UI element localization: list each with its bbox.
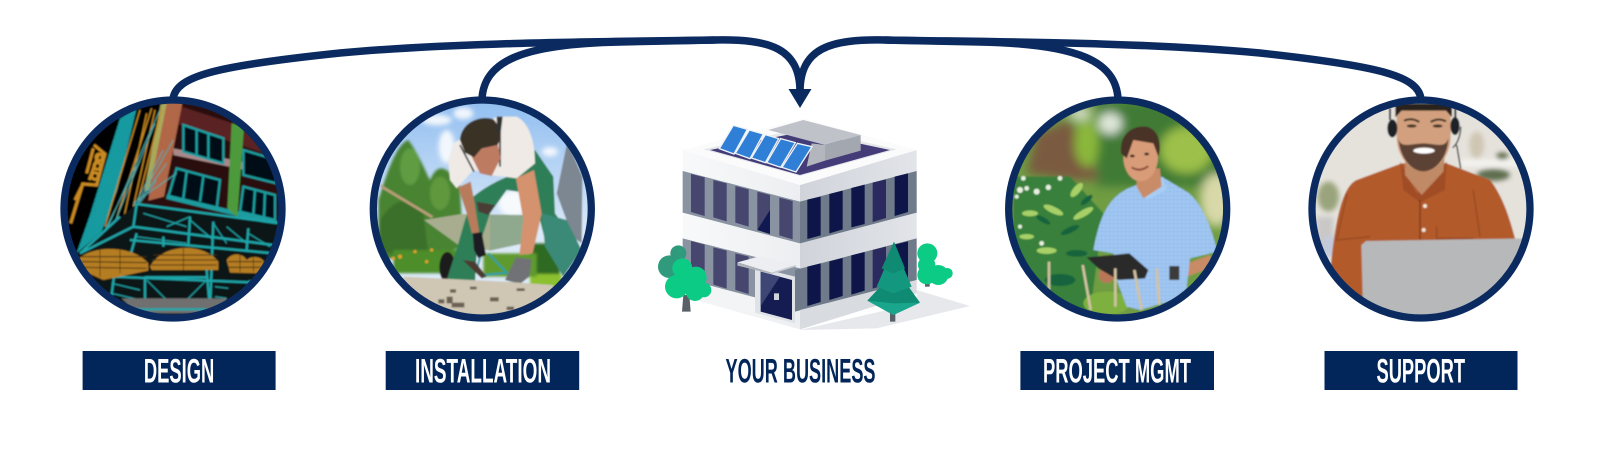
connector arrows to your business: [173, 40, 1421, 108]
front left tree: [665, 258, 711, 312]
headset: [1387, 108, 1461, 168]
panel: project mgmt: [1003, 97, 1233, 390]
neck: [1405, 155, 1445, 195]
panel: your business: [658, 118, 970, 390]
lower window band right: [795, 238, 917, 312]
illustration: office building with solar panels: [658, 118, 970, 330]
lower window band left: [683, 238, 800, 310]
circle ring: [1312, 100, 1530, 318]
photo: support agent with headset and laptop: [1316, 104, 1526, 314]
circle ring: [373, 100, 591, 318]
label: project mgmt: PROJECT MGMT: [1043, 352, 1191, 390]
roof: [683, 118, 917, 185]
label: project mgmt: [1020, 351, 1214, 390]
label: design: [83, 351, 276, 390]
door handles: [774, 293, 779, 300]
label: design: DESIGN: [144, 352, 214, 390]
upper window band left: [683, 171, 800, 243]
canopy: [737, 256, 796, 273]
laptop: [1360, 237, 1522, 314]
shirt: [1093, 177, 1217, 310]
head: [1396, 109, 1452, 166]
trees: [378, 140, 562, 287]
solar panels: [719, 125, 812, 172]
trousers: [446, 150, 558, 282]
head: [471, 144, 502, 177]
ground shadow: [800, 290, 970, 330]
label: installation: INSTALLATION: [415, 352, 551, 390]
photo: manager with clipboard among plants: [1012, 104, 1223, 314]
label: installation: [386, 351, 579, 390]
beard: [1398, 138, 1448, 171]
panel: design: [60, 97, 293, 390]
cobbles: [403, 276, 554, 314]
photo: wireframe building model: [68, 104, 278, 314]
traffic light: [71, 145, 105, 223]
panel: installation: [370, 97, 597, 390]
lower structure: [76, 205, 277, 302]
head: [1137, 168, 1162, 198]
upper window band right: [800, 171, 917, 243]
label: support: [1324, 351, 1518, 390]
teal band: [76, 108, 137, 255]
hair: [1395, 103, 1452, 117]
shirt: [1330, 162, 1516, 298]
circle ring: [1009, 100, 1227, 318]
label: support: SUPPORT: [1376, 352, 1465, 390]
photo: worker laying paving stones: [377, 104, 588, 314]
shirt: [448, 117, 535, 188]
foliage: [1013, 176, 1130, 315]
back left tree: [658, 245, 686, 278]
right tree: [917, 243, 953, 287]
orange domes: [79, 248, 264, 280]
circle ring: [64, 100, 282, 318]
entrance doors: [755, 267, 795, 323]
pine tree: [867, 242, 920, 322]
label: your business: YOUR BUSINESS: [726, 352, 876, 390]
panel: support: [1307, 97, 1537, 390]
